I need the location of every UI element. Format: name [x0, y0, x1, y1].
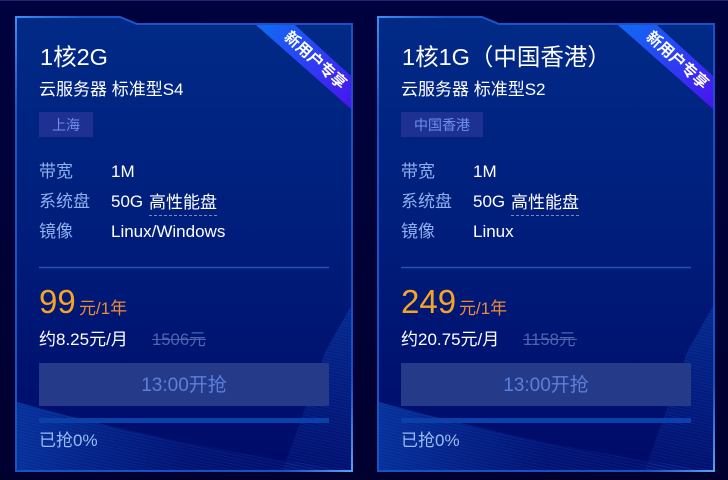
spec list: Linux/Windows [111, 222, 225, 241]
new user ribbon [618, 25, 713, 109]
monthly and original price: 1158元 [523, 330, 576, 349]
monthly and original price [401, 330, 577, 349]
disabled button [39, 363, 329, 406]
disabled button: 13:00开抢 [503, 374, 589, 396]
spec list: 1M [111, 162, 135, 181]
spec list: 带宽 [39, 162, 73, 181]
spec list: 高性能盘 [511, 193, 579, 212]
monthly and original price [39, 330, 206, 349]
region tag: 中国香港 [414, 117, 470, 133]
spec list: 带宽 [401, 162, 435, 181]
monthly and original price: 1506元 [152, 330, 206, 349]
spec list [39, 162, 225, 241]
new user ribbon [256, 25, 351, 109]
region tag: 上海 [52, 117, 80, 133]
card frame [16, 17, 352, 471]
spec list: Linux [473, 222, 514, 241]
new user ribbon: 新用户专享 [643, 27, 713, 93]
region tag [401, 112, 483, 137]
spec list: 高性能盘 [149, 193, 217, 212]
monthly and original price: 约8.25元/月 [39, 330, 128, 349]
price [401, 283, 507, 320]
spec list: 系统盘 [39, 192, 90, 211]
sold percentage: 已抢0% [401, 431, 460, 450]
spec list [401, 162, 579, 241]
heading: 1核1G（中国香港） [402, 44, 611, 70]
monthly and original price: 约20.75元/月 [401, 330, 499, 349]
spec list: 系统盘 [401, 192, 452, 211]
disabled button: 13:00开抢 [141, 374, 227, 396]
spec list: 1M [473, 162, 497, 181]
price: 元/1年 [459, 299, 507, 318]
spec list: 镜像 [39, 222, 73, 241]
new user ribbon: 新用户专享 [281, 27, 351, 93]
subtitle: 云服务器 标准型S4 [39, 80, 184, 99]
price: 99 [39, 283, 76, 320]
subtitle: 云服务器 标准型S2 [401, 80, 546, 99]
progress bar [39, 418, 329, 423]
card frame [378, 17, 714, 471]
disabled button [401, 363, 691, 406]
heading: 1核2G [40, 44, 108, 70]
progress bar [401, 418, 691, 423]
spec list: 50G [473, 192, 505, 211]
price: 249 [401, 283, 456, 320]
panel: 1核1G Hong Kong offer card [378, 17, 714, 471]
panel: 1核2G offer card [16, 17, 352, 471]
sold percentage: 已抢0% [39, 431, 98, 450]
spec list: 镜像 [401, 222, 435, 241]
spec list: 50G [111, 192, 143, 211]
price [39, 283, 127, 320]
region tag [39, 112, 93, 137]
price: 元/1年 [79, 299, 127, 318]
